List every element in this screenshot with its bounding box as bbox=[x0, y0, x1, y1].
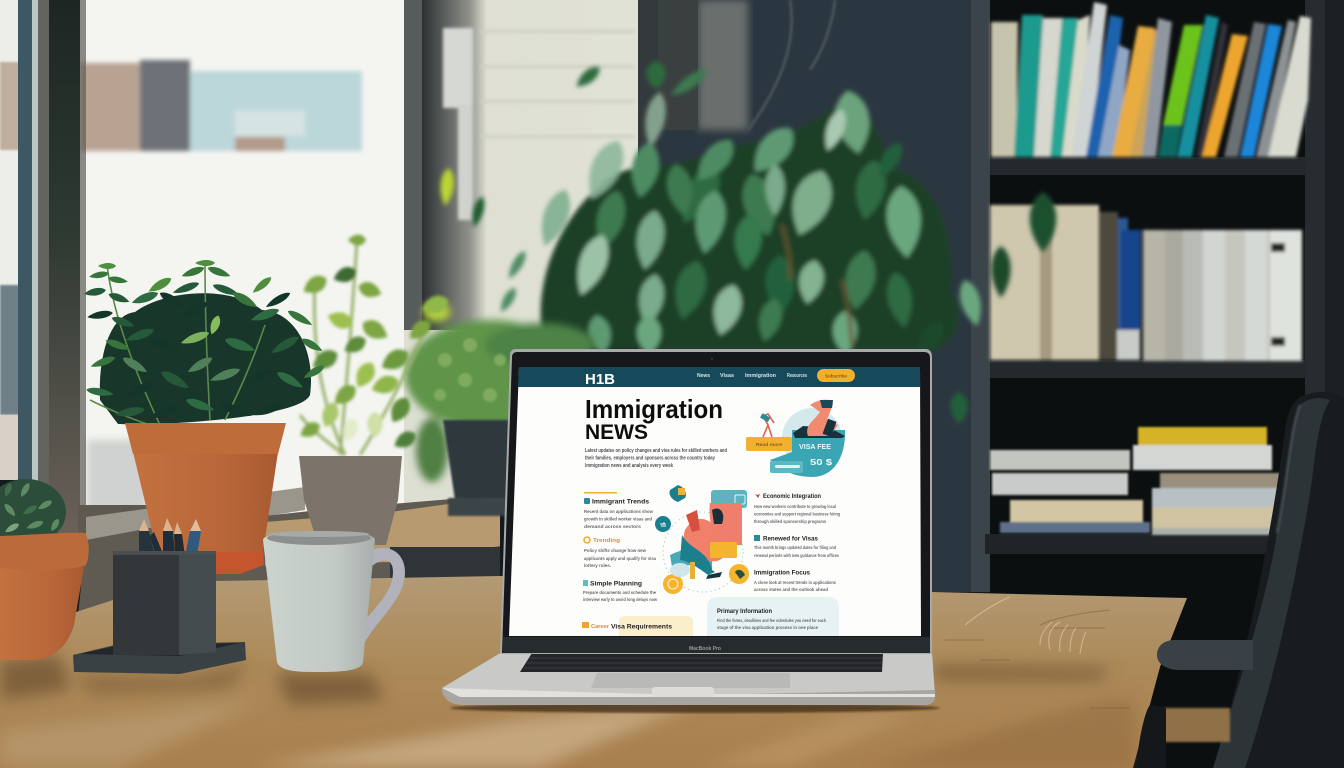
right column articles: through skilled sponsorship programs bbox=[754, 519, 826, 525]
headline bbox=[585, 394, 723, 444]
small succulent in left terracotta pot bbox=[0, 479, 89, 660]
primary information card: stage of the visa application process in one place bbox=[717, 625, 818, 631]
left column articles: Recent data on applications show bbox=[584, 509, 653, 515]
site logo: H1B bbox=[585, 372, 615, 388]
right column articles bbox=[754, 494, 840, 593]
laptop brand text: MacBook Pro bbox=[689, 646, 721, 652]
visa requirements card: Visa Requirements bbox=[611, 624, 673, 630]
right column articles: This month brings updated dates for filing and bbox=[754, 545, 836, 551]
visa requirements card bbox=[582, 616, 693, 636]
pencils bbox=[139, 518, 201, 556]
nav button: Subscribe bbox=[825, 374, 847, 378]
left column articles: Immigrant Trends bbox=[592, 500, 650, 506]
books: top shelf row bbox=[991, 2, 1311, 157]
left column articles: growth in skilled worker visas and bbox=[584, 516, 652, 522]
laptop base with keyboard bbox=[442, 652, 935, 705]
left column articles: applicants apply and qualify for visa bbox=[584, 556, 656, 562]
hero illustration: Read more bbox=[756, 442, 783, 447]
main plant in terracotta pot bbox=[84, 260, 326, 574]
headline: NEWS bbox=[585, 421, 648, 444]
books: bottom shelf stacks bbox=[990, 427, 1288, 535]
left column articles: Simple Planning bbox=[590, 582, 642, 588]
right column articles: A close look at recent trends in applications bbox=[754, 580, 836, 586]
left column articles: lottery rules. bbox=[584, 563, 611, 569]
primary information card bbox=[707, 597, 839, 636]
primary information card: Find the forms, deadlines and fee schedules you need for each bbox=[717, 618, 826, 624]
right column articles: renewal periods with new guidance from offices bbox=[754, 553, 839, 559]
left column articles: Prepare documents and schedule the bbox=[583, 590, 656, 596]
hero illustration bbox=[746, 400, 845, 477]
books: middle shelf row bbox=[990, 205, 1302, 361]
site navigation bar bbox=[518, 367, 920, 388]
left column articles bbox=[583, 492, 657, 603]
left column articles: demand across sectors bbox=[584, 524, 641, 530]
navigation links bbox=[697, 373, 807, 379]
light green plant in grey pot bbox=[297, 235, 451, 545]
right column articles: Immigration Focus bbox=[754, 570, 811, 576]
website on laptop screen bbox=[509, 367, 921, 636]
webcam bbox=[711, 358, 713, 360]
pencil holder with pencils on tray bbox=[73, 518, 246, 674]
left column articles: Trending bbox=[593, 538, 620, 544]
intro paragraph: their families, employers and sponsors across the country today bbox=[585, 456, 715, 462]
nav button bbox=[817, 369, 855, 382]
left column articles: Policy shifts change how new bbox=[584, 548, 646, 554]
intro paragraph: Immigration news and analysis every week bbox=[585, 463, 673, 469]
hero illustration: VISA FEE bbox=[799, 444, 831, 451]
coffee mug bbox=[263, 531, 405, 672]
office chair bbox=[1137, 392, 1344, 768]
left column articles: interview early to avoid long delays now bbox=[583, 597, 657, 603]
right column articles: Economic Integration bbox=[763, 494, 821, 500]
headline: Immigration bbox=[585, 394, 723, 424]
large blurred ivy plant bbox=[439, 61, 1056, 424]
navigation links: Visas bbox=[720, 373, 734, 379]
intro paragraph: Latest updates on policy changes and visa rules for skilled workers and bbox=[585, 448, 727, 454]
bookshelf bbox=[985, 0, 1344, 768]
right column articles: across states and the outlook ahead bbox=[754, 587, 828, 593]
front notch bbox=[652, 687, 714, 697]
trackpad bbox=[591, 673, 790, 688]
right column articles: Renewed for Visas bbox=[763, 536, 819, 542]
wood grain detail bbox=[945, 610, 1130, 708]
right column articles: How new workers contribute to growing local bbox=[754, 504, 836, 510]
visa requirements card: Career bbox=[591, 624, 609, 630]
navigation links: Resources bbox=[787, 373, 807, 379]
central illustration bbox=[655, 485, 749, 594]
hero illustration: 50 $ bbox=[810, 458, 833, 467]
laptop lid bbox=[500, 349, 932, 654]
navigation links: Immigration bbox=[745, 373, 776, 379]
keyboard bbox=[520, 653, 883, 672]
intro paragraph bbox=[585, 448, 727, 469]
primary information card: Primary Information bbox=[717, 609, 772, 615]
right column articles: economies and support regional business hiring bbox=[754, 512, 840, 518]
blurred background plant with dark pot bbox=[405, 302, 595, 516]
table top bbox=[0, 576, 1187, 768]
navigation links: News bbox=[697, 373, 710, 379]
